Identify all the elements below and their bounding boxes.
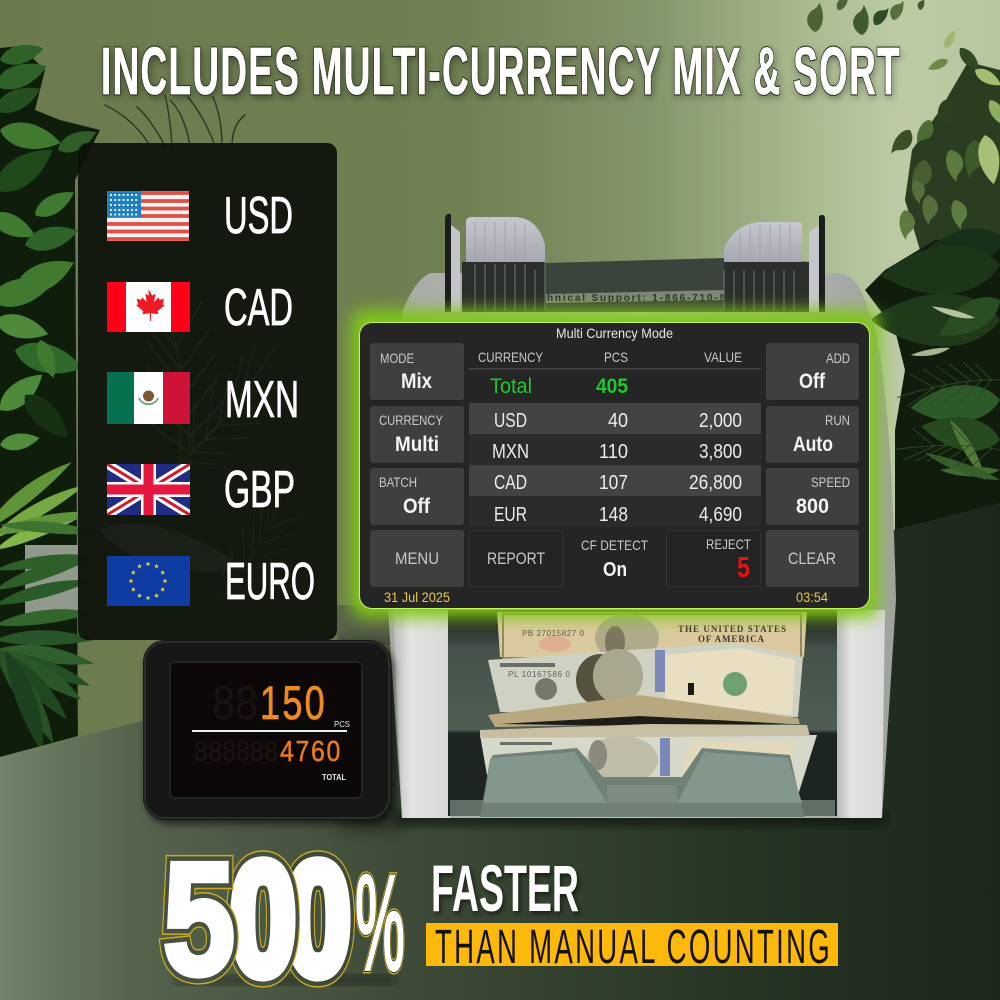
banknote: back note: THE UNITED STATES: [678, 624, 786, 634]
button: clear: CLEAR: [788, 549, 836, 568]
row: EUR: EUR: [494, 503, 527, 526]
status: reject: REJECT: [706, 536, 751, 552]
display label: PCS: PCS: [334, 720, 350, 729]
button: report: [470, 530, 562, 586]
button: add: Off: [799, 370, 826, 393]
table header: [469, 349, 761, 370]
status: CF detect: [581, 537, 648, 581]
row: USD: [469, 403, 761, 434]
label: GBP: GBP: [224, 461, 295, 519]
right paddle: [724, 222, 802, 262]
heading: FASTER: FASTER: [431, 851, 579, 925]
row: CAD: 26,800: [689, 471, 742, 494]
text: %: [355, 844, 405, 1000]
heading: FASTER: FASTER: [433, 854, 581, 928]
interior ledge: [450, 800, 835, 816]
button: speed: 800: [796, 495, 829, 518]
status: CF detect: CF DETECT: [581, 537, 648, 553]
banknote: back note: PB 27015827 0: [522, 629, 585, 638]
foliage: dark grass above panel: [105, 95, 245, 146]
button: menu: MENU: [395, 549, 439, 568]
flag: Mexico: [107, 372, 190, 424]
screen heading: Multi Currency Mode: [556, 325, 673, 341]
clock: 03:54: [796, 590, 828, 605]
display label: total: TOTAL: [322, 773, 346, 782]
banknote: folded tan note: [488, 695, 800, 727]
button: mode: Mix: [401, 370, 432, 393]
button: add: ADD: [826, 350, 850, 366]
label: MXN: MXN: [225, 371, 299, 429]
touch screen panel: [359, 322, 870, 609]
display ghost digits: 88: [212, 676, 258, 729]
button: currency: CURRENCY: [379, 412, 444, 428]
row: EUR: 148: [599, 503, 628, 526]
foliage: left plants: [0, 40, 100, 757]
text: %: [355, 844, 405, 1000]
button: batch: BATCH: [379, 474, 417, 490]
row: USD: 40: [608, 409, 628, 432]
flag: UK: [107, 464, 190, 515]
flag: EU: [107, 556, 190, 606]
display ghost digits: [194, 676, 278, 768]
label: USD: USD: [224, 187, 293, 245]
total row: Total: [490, 375, 532, 398]
percent sign: [355, 844, 405, 1000]
machine body shell: [388, 273, 896, 818]
banknote: hundred: [488, 643, 803, 717]
table header: PCS: [604, 349, 628, 365]
row: EUR: 4,690: [699, 503, 742, 526]
button: add: [766, 343, 859, 400]
row: CAD: 107: [599, 471, 628, 494]
row: MXN: 110: [599, 440, 628, 463]
left clip: [445, 214, 460, 312]
background: dark floor: [0, 503, 1000, 1000]
rear hopper band: [545, 258, 725, 312]
total row: 405: [596, 375, 628, 398]
flag: Canada: [107, 282, 190, 332]
row: USD: 2,000: [699, 409, 742, 432]
background: green wall: [0, 0, 1000, 800]
row: USD: USD: [494, 409, 527, 432]
display count: 150: 150: [260, 676, 327, 729]
banknote stack: [480, 724, 817, 795]
table header: CURRENCY: [478, 349, 544, 365]
panel: currency list: [78, 143, 337, 640]
heading: FASTER: [431, 851, 581, 928]
status: reject: 5: [737, 552, 750, 584]
button: batch: Off: [403, 495, 431, 518]
table header: VALUE: [704, 349, 742, 365]
button: currency: [370, 406, 464, 463]
button: mode: [370, 343, 464, 400]
button: speed: [766, 468, 859, 525]
right clip: [809, 215, 825, 312]
flag: USA: [107, 191, 189, 241]
screen glow: [351, 310, 879, 618]
row: EUR: [469, 496, 761, 527]
clear right guide: [724, 258, 812, 312]
rear hopper band: hnical Support: 1-866-710-9: [547, 293, 725, 304]
machine shadow: [395, 812, 885, 826]
banknote: back note: [497, 612, 807, 662]
display ghost digits: 888888: [194, 736, 278, 768]
stat: 500%: [163, 829, 405, 1000]
button: run: Auto: [793, 433, 833, 456]
banknote: back note: OF AMERICA: [698, 634, 764, 644]
label: EURO: EURO: [225, 553, 315, 611]
date: 31 Jul 2025: [384, 590, 450, 605]
background: stone patch beside panel: [337, 605, 397, 645]
status: CF detect: On: [603, 559, 627, 581]
left paddle: [466, 217, 545, 262]
row: MXN: [469, 434, 761, 465]
total row: [490, 375, 628, 398]
front tray: [480, 748, 805, 817]
external display: [143, 640, 394, 824]
row: MXN: MXN: [492, 440, 529, 463]
machine interior: [448, 610, 837, 816]
display total: 4760: 4760: [280, 736, 342, 768]
row: MXN: 3,800: [699, 440, 742, 463]
label: CAD: CAD: [224, 279, 293, 337]
button: clear: [766, 530, 859, 587]
button: currency: Multi: [395, 433, 439, 456]
button: menu: [370, 530, 464, 587]
machine side panel left: [393, 610, 450, 818]
button: speed: SPEED: [811, 474, 850, 490]
button: mode: MODE: [380, 350, 414, 366]
button: batch: [370, 468, 464, 525]
background: soft shade behind display: [340, 640, 400, 830]
machine side panel right: [837, 610, 885, 818]
machine: money counter: [388, 214, 896, 826]
clear left guide: [462, 262, 545, 312]
button: report: REPORT: [487, 549, 545, 568]
row: CAD: CAD: [494, 471, 527, 494]
foliage: right plants: [807, 0, 1000, 560]
button: run: [766, 406, 859, 463]
banknote: hundred: PL 10167586 0: [508, 670, 571, 679]
button: run: RUN: [825, 412, 850, 428]
row: CAD: [469, 465, 761, 496]
status: reject: [666, 530, 760, 586]
